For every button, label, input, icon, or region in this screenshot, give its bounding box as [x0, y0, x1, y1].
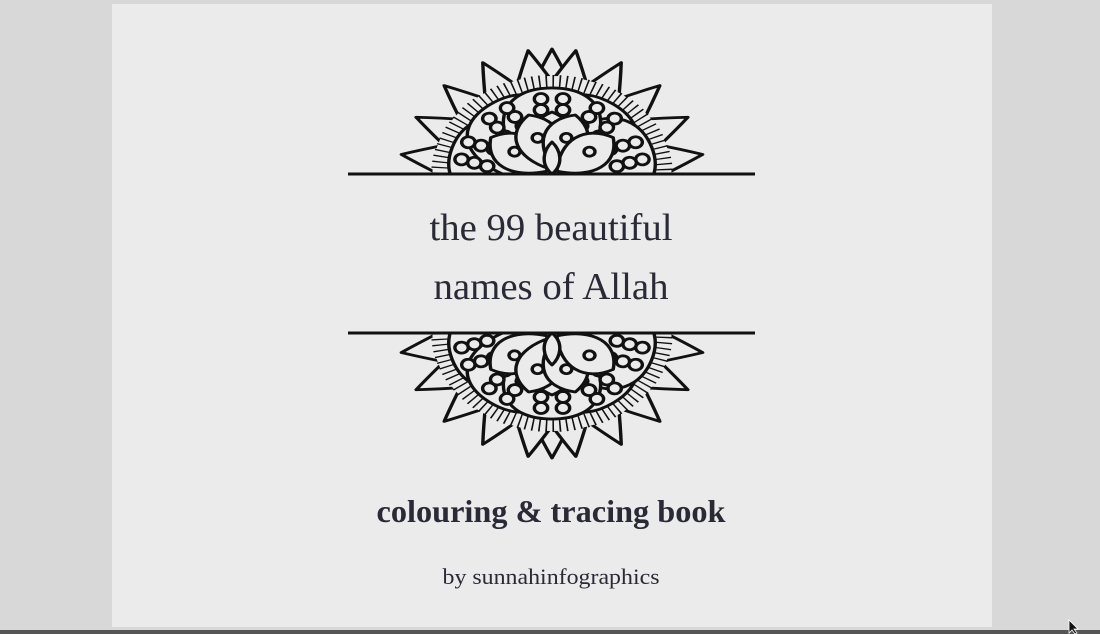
mandala top	[398, 48, 706, 272]
subtitle: colouring & tracing book	[376, 493, 726, 529]
divider lines	[348, 174, 755, 333]
mandala bottom	[398, 235, 706, 459]
page panel	[112, 4, 992, 627]
title: names of Allah	[434, 266, 668, 308]
author: by sunnahinfographics	[442, 564, 660, 589]
icon: cursor	[1069, 620, 1078, 634]
title	[430, 207, 672, 308]
title: the 99 beautiful	[430, 207, 672, 249]
